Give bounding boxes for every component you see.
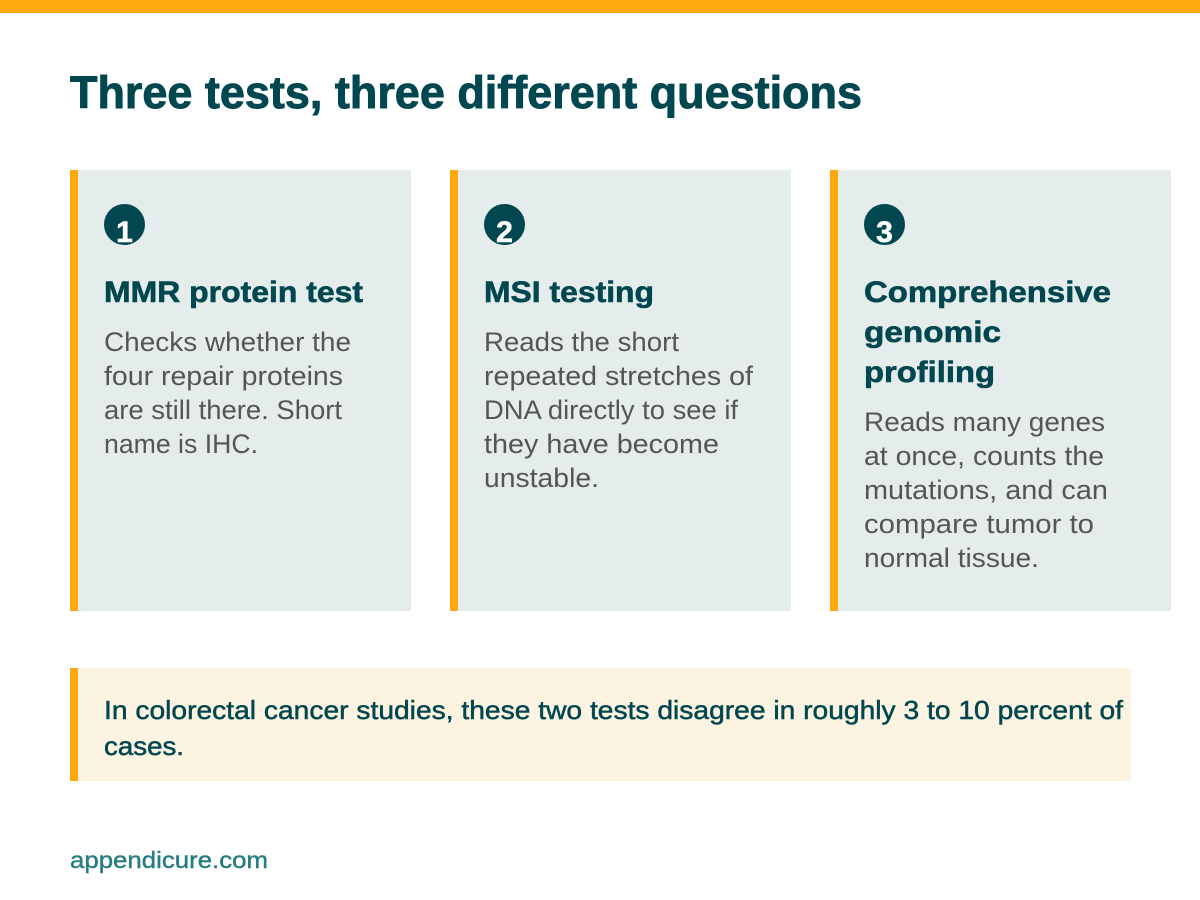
text: MSI description: repeated stretches of — [484, 361, 754, 391]
heading: Comprehensive genomic profiling: genomic — [864, 316, 1001, 349]
icon: number 3: 3 — [876, 216, 893, 249]
icon: number 2: 2 — [496, 216, 513, 249]
icon: number 3 — [864, 204, 905, 249]
panel: MSI testing — [450, 170, 791, 611]
text: MSI description: Reads the short — [484, 327, 680, 357]
text: profiling description: normal tissue. — [864, 543, 1039, 573]
text: MMR description — [104, 327, 351, 459]
text: MMR description: name is IHC. — [104, 429, 258, 459]
text: profiling description: at once, counts the — [864, 441, 1104, 471]
panel: MMR protein test — [70, 170, 411, 611]
heading: Comprehensive genomic profiling: Comprehensive — [864, 276, 1111, 309]
text: MSI description: they have become — [484, 429, 719, 459]
callout: cases. — [104, 731, 184, 761]
heading: Comprehensive genomic profiling: profiling — [864, 356, 995, 389]
text: MMR description: Checks whether the — [104, 327, 351, 357]
panel: Comprehensive genomic profiling — [830, 170, 1171, 611]
callout — [70, 668, 1131, 781]
heading: MSI testing: MSI testing — [484, 276, 654, 309]
text: profiling description: compare tumor to — [864, 509, 1094, 539]
text: MSI description — [484, 327, 754, 493]
text: profiling description: Reads many genes — [864, 407, 1105, 437]
text: MMR description: four repair proteins — [104, 361, 343, 391]
top accent bar — [0, 0, 1200, 13]
footer: website: appendicure.com — [70, 847, 268, 873]
heading: MMR protein test: MMR protein test — [104, 276, 363, 309]
callout: In colorectal cancer studies, these two tests disagree in roughly 3 to 10 percent of — [104, 695, 1124, 725]
text: profiling description: mutations, and can — [864, 475, 1108, 505]
icon: number 1 — [104, 204, 145, 249]
text: MSI description: DNA directly to see if — [484, 395, 739, 425]
heading: Comprehensive genomic profiling — [864, 276, 1111, 389]
title: Three tests, three different questions — [70, 67, 862, 118]
text: MMR description: are still there. Short — [104, 395, 342, 425]
text: MSI description: unstable. — [484, 463, 599, 493]
icon: number 2 — [484, 204, 525, 249]
icon: number 1: 1 — [116, 216, 133, 249]
text: profiling description — [864, 407, 1108, 573]
